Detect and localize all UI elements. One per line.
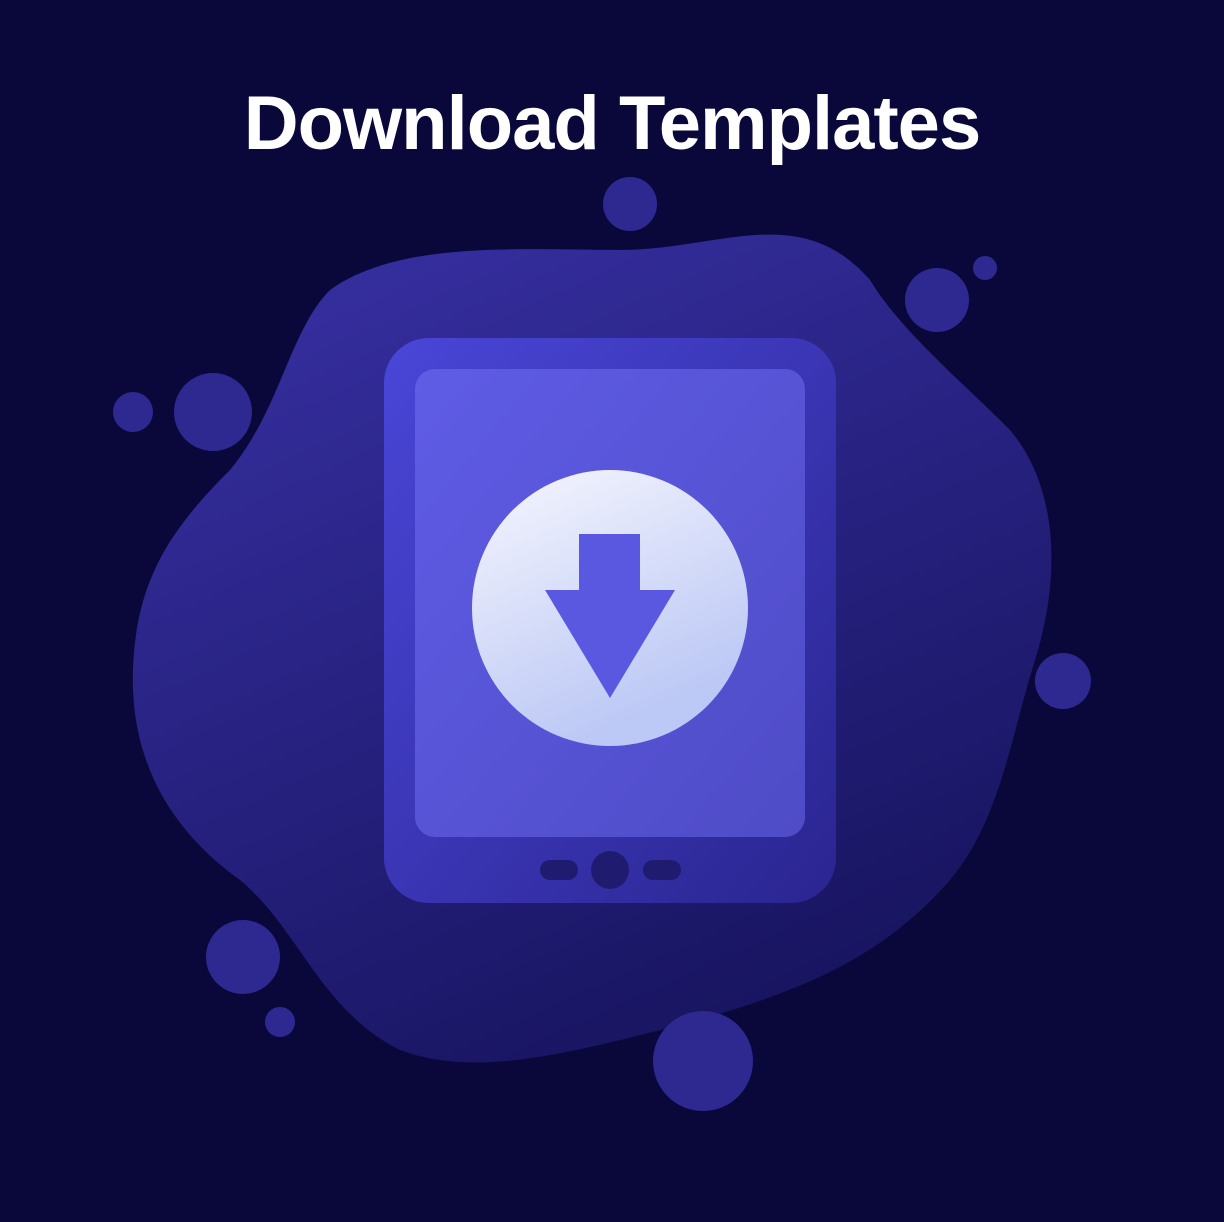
tablet <box>384 338 836 903</box>
download icon <box>472 470 748 746</box>
decorative bubbles <box>113 177 1091 1111</box>
tablet buttons <box>540 851 681 889</box>
screen <box>415 369 805 837</box>
blob background <box>133 235 1051 1062</box>
title: Download Templates <box>244 81 980 166</box>
